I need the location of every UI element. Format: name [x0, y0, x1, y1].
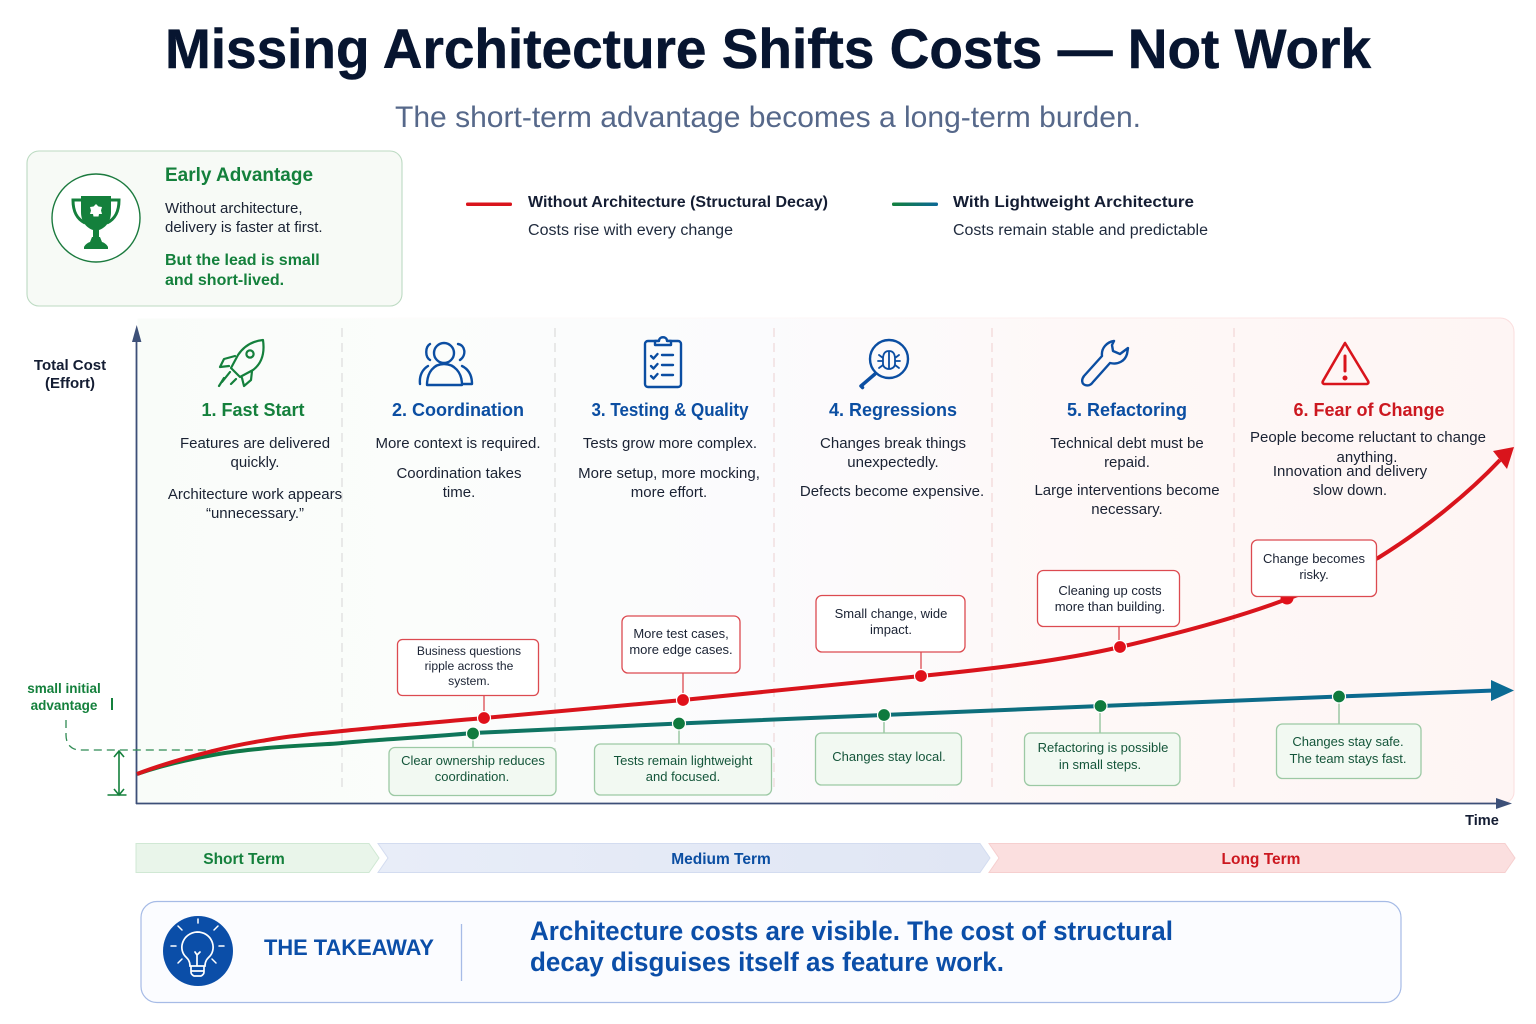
icon: trophy — [52, 174, 140, 262]
legend: without architecture: Without Architecture (Structural Decay) — [528, 194, 828, 211]
legend: with lightweight architecture: With Lightweight Architecture — [953, 194, 1194, 211]
callout: more test cases: More test cases, — [633, 626, 729, 641]
callout: clear ownership: Clear ownership reduces — [401, 753, 545, 768]
legend: with lightweight architecture — [892, 194, 1208, 239]
body text: “unnecessary.” — [206, 505, 304, 522]
body text: quickly. — [231, 454, 279, 471]
body text: More context is required. — [375, 435, 541, 452]
callout: refactoring possible: Refactoring is possible — [1038, 740, 1168, 755]
icon: rocket — [219, 340, 264, 386]
emphasis text: and short-lived. — [165, 272, 284, 289]
legend: without architecture — [466, 194, 828, 239]
column 5: refactoring — [1034, 341, 1220, 518]
body text — [800, 435, 984, 500]
column 1: fast start — [168, 340, 342, 522]
body text: Innovation and delivery — [1273, 463, 1428, 480]
heading: 6. Fear of Change — [1294, 400, 1444, 420]
takeaway message — [530, 916, 1173, 977]
heading: 2. Coordination — [392, 400, 524, 420]
takeaway message: Architecture costs are visible. The cost of structural — [530, 916, 1173, 946]
body text: People become reluctant to change — [1250, 429, 1486, 446]
panel: early advantage — [27, 151, 402, 306]
callout: small change: impact. — [870, 622, 912, 637]
callout: more test cases — [622, 616, 740, 706]
panel: the takeaway — [141, 902, 1401, 1002]
label: the takeaway: THE TAKEAWAY — [264, 935, 434, 960]
icon: light bulb — [163, 916, 233, 986]
chart background — [137, 318, 1514, 803]
small initial advantage marker — [27, 681, 213, 795]
callout: business questions: system. — [448, 674, 490, 688]
body text — [578, 435, 760, 501]
timeline: short term: Short Term — [203, 851, 285, 868]
callout: cleaning up: more than building. — [1055, 599, 1165, 614]
y axis — [132, 325, 141, 804]
body text: Technical debt must be — [1050, 435, 1204, 452]
callout: cleaning up — [1038, 570, 1180, 654]
timeline: medium term — [378, 844, 990, 872]
body text: anything. — [1337, 449, 1397, 466]
emphasis text — [165, 252, 320, 289]
body text: Changes break things — [820, 435, 966, 452]
body text: necessary. — [1091, 501, 1163, 518]
callout: refactoring possible — [1024, 700, 1180, 786]
heading: 3. Testing & Quality — [592, 400, 748, 420]
timeline: medium term: Medium Term — [671, 851, 771, 868]
callout: small change — [816, 596, 965, 682]
callout: refactoring possible: in small steps. — [1059, 757, 1141, 772]
body text: Tests grow more complex. — [583, 435, 757, 452]
title: Missing Architecture Shifts Costs — Not Work — [165, 17, 1372, 80]
icon: wrench — [1082, 341, 1128, 385]
legend: without architecture: Costs rise with every change — [528, 222, 733, 239]
icon: bug under magnifier — [861, 340, 908, 388]
callout: changes stay safe: The team stays fast. — [1289, 751, 1407, 766]
body text — [1034, 435, 1220, 518]
body text — [168, 435, 342, 522]
emphasis text: But the lead is small — [165, 252, 320, 269]
legend: with lightweight architecture: Costs remain stable and predictable — [953, 222, 1208, 239]
x axis — [136, 798, 1512, 809]
callout: business questions — [398, 640, 538, 724]
body text: repaid. — [1104, 454, 1150, 471]
callout: tests remain lightweight: and focused. — [646, 769, 720, 784]
body text: Defects become expensive. — [800, 483, 984, 500]
label — [27, 681, 101, 713]
heading: 1. Fast Start — [202, 400, 304, 420]
column 3: testing — [578, 337, 760, 501]
icon: warning triangle — [1323, 343, 1368, 384]
body text: delivery is faster at first. — [165, 219, 323, 236]
column 4: regressions — [800, 340, 984, 500]
body text — [375, 435, 541, 501]
callout: business questions: ripple across the — [425, 659, 514, 673]
line: with lightweight architecture — [137, 680, 1514, 774]
callout: change becomes risky: Change becomes — [1263, 551, 1365, 566]
x axis label: Time — [1465, 813, 1499, 829]
heading: 5. Refactoring — [1067, 400, 1187, 420]
timeline: long term: Long Term — [1222, 851, 1300, 868]
body text: Features are delivered — [180, 435, 330, 452]
body text — [165, 200, 323, 236]
callout: tests remain lightweight — [594, 717, 772, 795]
icon: clipboard checklist — [645, 337, 681, 387]
line: without architecture — [137, 447, 1514, 774]
callout: clear ownership — [389, 727, 556, 796]
callout: more test cases: more edge cases. — [629, 642, 733, 657]
body text: Architecture work appears — [168, 486, 342, 503]
body text: time. — [443, 484, 475, 501]
heading: 4. Regressions — [829, 400, 957, 420]
body text: Without architecture, — [165, 200, 303, 217]
body text: unexpectedly. — [847, 454, 939, 471]
callout: business questions: Business questions — [417, 644, 521, 658]
icon: people — [420, 343, 472, 385]
callout: change becomes risky: risky. — [1299, 567, 1329, 582]
callout: change becomes risky — [1252, 540, 1376, 604]
label: advantage — [31, 698, 98, 713]
body text: More setup, more mocking, — [578, 465, 760, 482]
timeline: short term — [136, 844, 379, 872]
callout: changes stay safe — [1276, 690, 1421, 778]
column 2: coordination — [375, 343, 541, 501]
callout: cleaning up: Cleaning up costs — [1058, 583, 1162, 598]
callout: changes stay safe: Changes stay safe. — [1292, 734, 1404, 749]
timeline: long term — [989, 844, 1515, 872]
subtitle: The short-term advantage becomes a long-term burden. — [395, 101, 1141, 134]
callout: tests remain lightweight: Tests remain lightweight — [614, 753, 753, 768]
y axis label — [34, 357, 106, 392]
body text: slow down. — [1313, 482, 1387, 499]
label: small initial — [27, 681, 101, 696]
body text: Coordination takes — [396, 465, 522, 482]
body text: more effort. — [631, 484, 707, 501]
y axis label: Total Cost — [34, 357, 106, 374]
callout: clear ownership: coordination. — [435, 769, 509, 784]
heading: early advantage: Early Advantage — [165, 164, 313, 186]
body text — [1250, 429, 1486, 499]
callout: changes stay local — [816, 708, 962, 785]
column 6: fear of change — [1250, 343, 1486, 499]
callout: changes stay local: Changes stay local. — [832, 749, 946, 764]
y axis label: (Effort) — [45, 375, 95, 392]
takeaway message: decay disguises itself as feature work. — [530, 947, 1004, 977]
body text: Large interventions become — [1034, 482, 1220, 499]
callout: small change: Small change, wide — [835, 606, 947, 621]
chart: cost over time — [27, 318, 1514, 829]
